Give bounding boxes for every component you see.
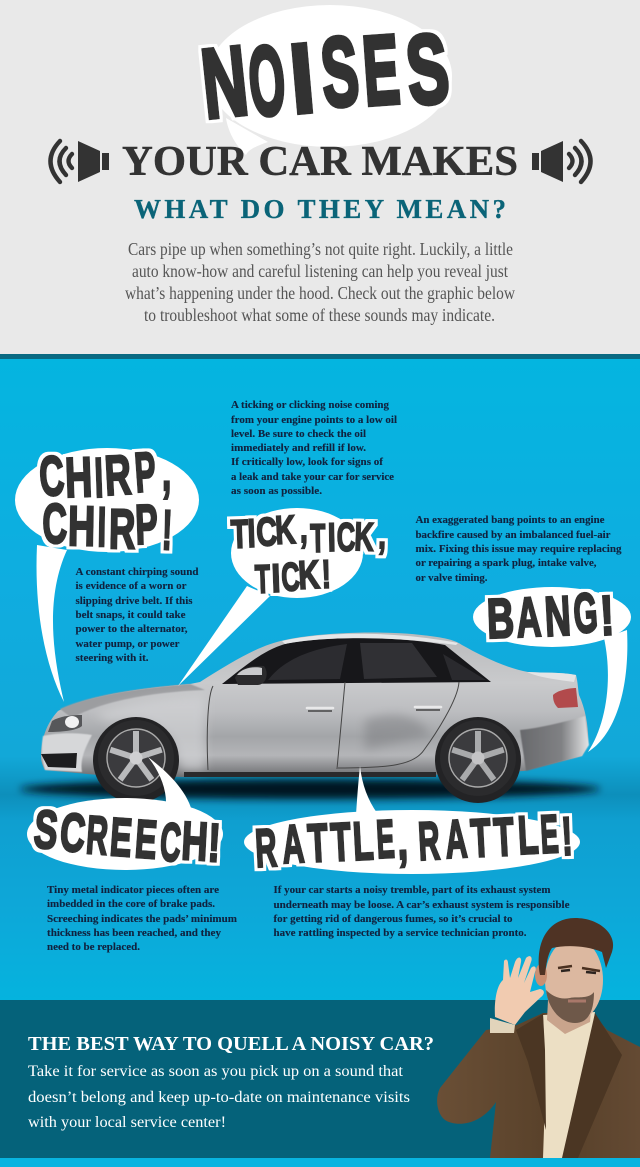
sound word: TICK, TICK, TICK!: I: [327, 516, 336, 560]
spoiler highlight: [527, 672, 576, 682]
text: screech description: Screeching indicates the pads’ minimum: [47, 913, 237, 925]
text: tick description: [231, 399, 397, 497]
sound word: RATTLE, RATTLE!: T: [492, 808, 515, 868]
speech bubble: rattle: [244, 766, 580, 874]
sound word: TICK, TICK, TICK!: !: [321, 553, 332, 597]
body text: doesn’t belong and keep up-to-date on maintenance visits: [28, 1089, 410, 1106]
head: [545, 938, 603, 1022]
sound word: RATTLE, RATTLE!: E: [375, 809, 396, 871]
intro paragraph: what’s happening under the hood. Check out the graphic below: [125, 283, 515, 303]
text: chirp description: belt snaps, it could take: [76, 609, 186, 621]
sound word: BANG!: N: [543, 583, 572, 648]
sound word: RATTLE, RATTLE!: [254, 804, 574, 879]
sound word: TICK, TICK, TICK!: I: [271, 555, 281, 601]
sound word: SCREECH!: [32, 799, 222, 874]
rear lower panel: [520, 716, 589, 771]
car body: [41, 633, 588, 777]
intro paragraph: auto know-how and careful listening can help you reveal just: [132, 261, 508, 281]
door handle shadows: [308, 710, 440, 711]
quarter window: [443, 654, 486, 680]
text: tick description: as soon as possible.: [231, 485, 322, 497]
sound word: TICK, TICK, TICK!: I: [247, 512, 256, 556]
beard: [546, 990, 594, 1023]
sound word: RATTLE, RATTLE!: T: [469, 809, 492, 869]
title word: NOISES: S: [317, 15, 363, 128]
body text: with your local service center!: [28, 1114, 226, 1131]
sound word: CHIRP, CHIRP!: [37, 439, 173, 562]
shirt cuff: [490, 1018, 515, 1033]
front fender highlight: [95, 695, 205, 770]
speech bubble: noises: [208, 5, 452, 155]
intro paragraph: Cars pipe up when something’s not quite right. Luckily, a little: [128, 239, 513, 259]
text: rattle description: underneath may be loose. A car’s exhaust system is responsible: [274, 899, 570, 911]
jacket: [437, 1013, 640, 1158]
sound word: SCREECH!: C: [58, 801, 88, 864]
sound word: BANG!: B: [486, 588, 515, 651]
text: chirp description: [76, 566, 198, 664]
text: bang description: [416, 514, 622, 584]
wheel arch front: [93, 717, 179, 803]
title word: NOISES: O: [244, 26, 290, 138]
rear window: [360, 643, 437, 679]
sound word: TICK, TICK, TICK!: ,: [300, 507, 308, 551]
sound word: SCREECH!: E: [108, 808, 134, 869]
sound word: TICK, TICK, TICK!: T: [254, 558, 271, 603]
text: chirp description: slipping drive belt. If this: [76, 595, 192, 607]
sound word: TICK, TICK, TICK!: [230, 507, 387, 603]
title word: NOISES: N: [197, 26, 253, 139]
rear wheel: [440, 720, 516, 796]
sound word: RATTLE, RATTLE!: T: [306, 814, 329, 874]
text: bang description: mix. Fixing this issue may require replacing: [416, 543, 622, 555]
tail lamp: [553, 688, 578, 708]
text: bang description: An exaggerated bang points to an engine: [416, 514, 605, 526]
text: chirp description: is evidence of a worn or: [76, 580, 187, 592]
text: screech description: Tiny metal indicator pieces often are: [47, 884, 219, 896]
sound word: BANG!: !: [598, 585, 616, 647]
speech bubble: chirp: [15, 448, 199, 702]
eye pupils: [561, 970, 596, 973]
text: tick description: from your engine points to a low oil: [231, 414, 397, 426]
text: tick description: level. Be sure to check the oil: [231, 428, 366, 440]
text: chirp description: A constant chirping sound: [76, 566, 198, 578]
sound word: CHIRP, CHIRP!: H: [67, 496, 96, 558]
text: screech description: thickness has been reached, and they: [47, 927, 222, 939]
sound word: SCREECH!: E: [133, 810, 159, 871]
text: bang description: or valve timing.: [416, 572, 488, 584]
car shadow: [20, 779, 600, 799]
text: tick description: If critically low, look for signs of: [231, 456, 383, 468]
subtitle: WHAT DO THEY MEAN?: [134, 194, 506, 224]
sound word: RATTLE, RATTLE!: A: [281, 814, 306, 875]
panel: blue main background: [0, 354, 640, 1000]
text: tick description: a leak and take your car for service: [231, 471, 394, 483]
sound word: SCREECH!: S: [32, 799, 60, 861]
mirror: [235, 666, 267, 685]
speech bubble: tick: [178, 508, 363, 686]
sound word: CHIRP, CHIRP!: ,: [162, 439, 171, 502]
title word: NOISES: [197, 13, 454, 139]
intro paragraph: [125, 239, 515, 325]
panel: header background: [0, 0, 640, 354]
sound word: BANG!: A: [515, 585, 543, 649]
sound word: RATTLE, RATTLE!: R: [254, 819, 278, 879]
text: rattle description: have rattling inspected by a service technician pronto.: [274, 927, 527, 939]
sound word: CHIRP, CHIRP!: I: [97, 495, 107, 559]
door shading: [365, 715, 430, 750]
text: rattle description: for getting rid of dangerous fumes, so it’s crucial to: [274, 913, 512, 925]
sound word: CHIRP, CHIRP!: I: [93, 446, 104, 509]
wheel arch rear: [435, 717, 521, 803]
sound word: RATTLE, RATTLE!: L: [351, 810, 375, 872]
sound word: TICK, TICK, TICK!: C: [280, 556, 301, 601]
sound word: TICK, TICK, TICK!: T: [230, 513, 249, 557]
sound word: TICK, TICK, TICK!: T: [310, 517, 326, 562]
hood shade: [60, 684, 205, 718]
sound word: CHIRP, CHIRP!: C: [42, 492, 68, 555]
icon: speaker right: [532, 141, 590, 182]
shirt: [543, 1012, 595, 1158]
sound word: CHIRP, CHIRP!: H: [64, 447, 93, 510]
door lines: [207, 682, 459, 770]
grille: [41, 753, 77, 768]
sound word: TICK, TICK, TICK!: ,: [378, 513, 387, 558]
text: chirp description: steering with it.: [76, 652, 149, 664]
front wheel: [98, 720, 174, 796]
sound word: CHIRP, CHIRP!: P: [134, 492, 159, 556]
sound word: SCREECH!: H: [180, 810, 209, 872]
speech bubble: bang: [473, 587, 631, 752]
sound word: RATTLE, RATTLE!: !: [560, 807, 574, 867]
sound word: BANG!: [486, 581, 616, 651]
front bumper light: [42, 733, 92, 772]
text: rattle description: [274, 884, 570, 939]
hand: [495, 956, 544, 1025]
sound word: BANG!: G: [571, 581, 600, 645]
sound word: SCREECH!: R: [84, 806, 110, 867]
headlight lens: [65, 716, 79, 728]
text: screech description: need to be replaced.: [47, 941, 140, 953]
icon: speaker left: [50, 141, 109, 182]
sound word: CHIRP, CHIRP!: R: [109, 498, 136, 561]
speech bubble: screech: [27, 757, 223, 870]
text: tick description: immediately and refill if low.: [231, 442, 366, 454]
sound word: TICK, TICK, TICK!: C: [255, 509, 278, 555]
sound word: TICK, TICK, TICK!: K: [354, 515, 375, 560]
front window: [268, 644, 347, 680]
title word: NOISES: E: [359, 13, 403, 126]
skirt: [184, 772, 436, 777]
intro paragraph: to troubleshoot what some of these sounds may indicate.: [144, 305, 495, 325]
text: screech description: imbedded in the core of brake pads.: [47, 898, 215, 910]
lapels: [516, 1013, 622, 1158]
text: chirp description: power to the alternator,: [76, 623, 188, 635]
headlight: [48, 715, 82, 732]
sound word: RATTLE, RATTLE!: R: [417, 812, 441, 872]
body text: Take it for service as soon as you pick up on a sound that: [28, 1063, 404, 1080]
text: chirp description: water pump, or power: [76, 638, 180, 650]
sound word: CHIRP, CHIRP!: C: [37, 444, 66, 508]
sound word: CHIRP, CHIRP!: P: [133, 440, 158, 504]
sound word: CHIRP, CHIRP!: !: [161, 498, 173, 562]
sound word: TICK, TICK, TICK!: K: [274, 508, 297, 553]
photo: man listening: [437, 918, 640, 1158]
ear: [535, 964, 547, 986]
sound word: SCREECH!: C: [158, 813, 183, 874]
roof rail highlight: [282, 634, 458, 645]
text: bang description: or repairing a spark plug, intake valve,: [416, 557, 597, 569]
title: your car makes: YOUR CAR MAKES: [122, 139, 518, 185]
panel: bottom call to action: [0, 1000, 640, 1167]
heading: THE BEST WAY TO QUELL A NOISY CAR?: [28, 1033, 434, 1055]
sound word: RATTLE, RATTLE!: L: [516, 804, 540, 866]
neck: [547, 1000, 592, 1034]
title word: NOISES: S: [401, 14, 454, 126]
window frame: [222, 638, 491, 684]
sound word: CHIRP, CHIRP!: R: [103, 444, 133, 508]
sound word: TICK, TICK, TICK!: K: [297, 553, 321, 598]
sound word: RATTLE, RATTLE!: E: [539, 804, 560, 866]
sound word: RATTLE, RATTLE!: A: [444, 809, 469, 870]
eyes and brows: [558, 966, 600, 971]
body text: [28, 1063, 410, 1131]
sound word: RATTLE, RATTLE!: ,: [395, 810, 409, 871]
text: tick description: A ticking or clicking noise coming: [231, 399, 390, 411]
door handles: [307, 707, 441, 708]
mouth: [568, 1000, 586, 1002]
sound word: RATTLE, RATTLE!: T: [329, 813, 352, 873]
text: bang description: backfire caused by an imbalanced fuel-air: [416, 529, 611, 541]
hair: [539, 918, 613, 975]
sound word: SCREECH!: !: [206, 812, 222, 873]
illustration: silver car: [41, 633, 589, 803]
text: screech description: [47, 884, 237, 953]
title word: NOISES: I: [286, 24, 318, 134]
sound word: TICK, TICK, TICK!: C: [336, 516, 356, 561]
text: rattle description: If your car starts a noisy tremble, part of its exhaust system: [274, 884, 551, 896]
